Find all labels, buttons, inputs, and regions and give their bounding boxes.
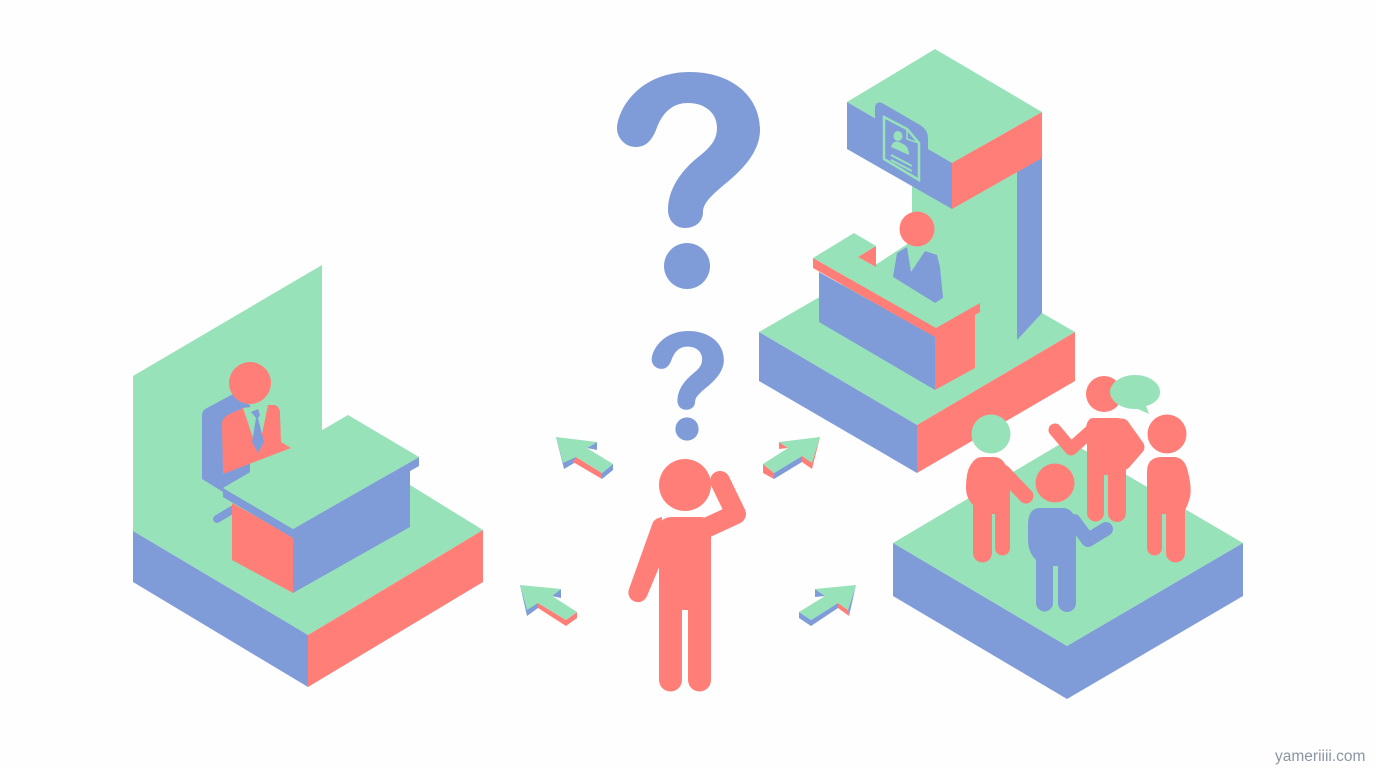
seated employee xyxy=(222,362,291,474)
receptionist xyxy=(893,212,943,303)
base top and column xyxy=(759,150,1075,425)
panel: right group discussion platform xyxy=(893,375,1243,699)
wall and floor xyxy=(133,265,483,635)
base left side xyxy=(759,332,917,473)
base right side xyxy=(917,332,1075,473)
arrow: lower right xyxy=(799,585,856,626)
icon: large question mark xyxy=(617,72,760,289)
panel: left office desk scene xyxy=(133,265,483,687)
platform right side xyxy=(1067,543,1243,699)
icon: small question mark xyxy=(652,331,724,441)
desk xyxy=(223,415,419,593)
platform right side xyxy=(308,530,483,687)
person: left with green head xyxy=(966,414,1026,562)
arrow: upper right xyxy=(763,437,820,479)
platform top xyxy=(893,440,1243,646)
person: back gesturing xyxy=(1055,376,1137,522)
reception counter xyxy=(813,233,980,390)
person: front blue xyxy=(1028,464,1106,612)
office chair xyxy=(202,394,250,519)
arrow: upper left xyxy=(556,437,613,479)
person: right xyxy=(1147,414,1191,562)
watermark: yameriiii.com xyxy=(1275,748,1365,765)
icon: speech bubble xyxy=(1110,375,1160,414)
overhead block xyxy=(847,49,1042,209)
platform left side xyxy=(133,531,308,687)
arrow: lower left xyxy=(520,585,577,626)
column side xyxy=(1017,156,1042,340)
icon: resume document xyxy=(884,117,919,180)
panel: right reception tower scene xyxy=(759,49,1075,473)
central confused person xyxy=(628,459,736,692)
platform left side xyxy=(893,543,1067,699)
